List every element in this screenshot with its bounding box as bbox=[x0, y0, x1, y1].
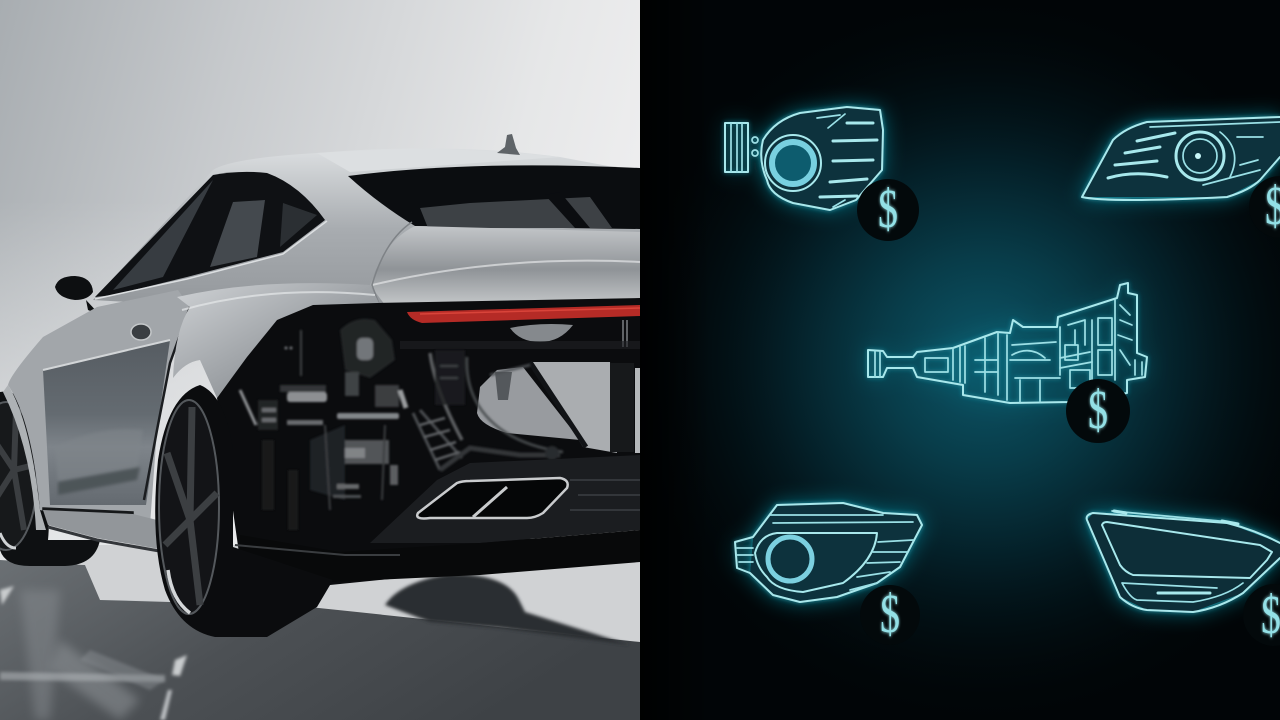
icon: dollar badge 4: $ bbox=[880, 584, 900, 645]
icon: dollar badge 3 bbox=[1066, 379, 1130, 443]
rear wheel bbox=[155, 385, 333, 637]
car body bbox=[3, 148, 640, 552]
panel: neon parts on dark background bbox=[640, 0, 1280, 720]
roof antenna bbox=[497, 134, 520, 155]
door bbox=[8, 290, 190, 525]
door crack bbox=[144, 307, 190, 500]
front wheel bbox=[0, 392, 100, 566]
side glass bbox=[95, 172, 327, 299]
rear bumper and exhaust bbox=[235, 455, 640, 582]
rear fender bbox=[173, 283, 380, 398]
rear window bbox=[348, 165, 640, 229]
icon: transmission, centre bbox=[868, 283, 1147, 403]
front arch trim bbox=[3, 385, 46, 530]
icon: dollar badge 3: $ bbox=[1088, 380, 1108, 441]
icon: dollar badge 1 bbox=[857, 179, 919, 241]
panel: studio car photo bbox=[0, 0, 640, 720]
icon: dollar badge 5 bbox=[1243, 584, 1280, 646]
mirror bbox=[55, 276, 100, 315]
icon: dollar badge 2 bbox=[1249, 176, 1280, 238]
icon: slim headlight, top right bbox=[1082, 117, 1280, 200]
door handle bbox=[131, 324, 151, 340]
icon: round headlight part, top left bbox=[725, 107, 883, 210]
icon: dollar badge 1: $ bbox=[878, 179, 898, 240]
components bbox=[240, 319, 563, 530]
rear deck bbox=[370, 226, 640, 305]
exposed mechanical section bbox=[217, 298, 640, 585]
icon: bumper trim, bottom right bbox=[1087, 511, 1280, 612]
icon: dollar badge 4 bbox=[860, 584, 920, 645]
icon: fog lamp, bottom left bbox=[735, 503, 922, 602]
silver boot panel bbox=[530, 362, 617, 453]
reflective floor bbox=[0, 545, 640, 720]
tail light bbox=[407, 305, 640, 323]
side sill bbox=[43, 510, 165, 550]
upper body shell bbox=[93, 148, 640, 310]
